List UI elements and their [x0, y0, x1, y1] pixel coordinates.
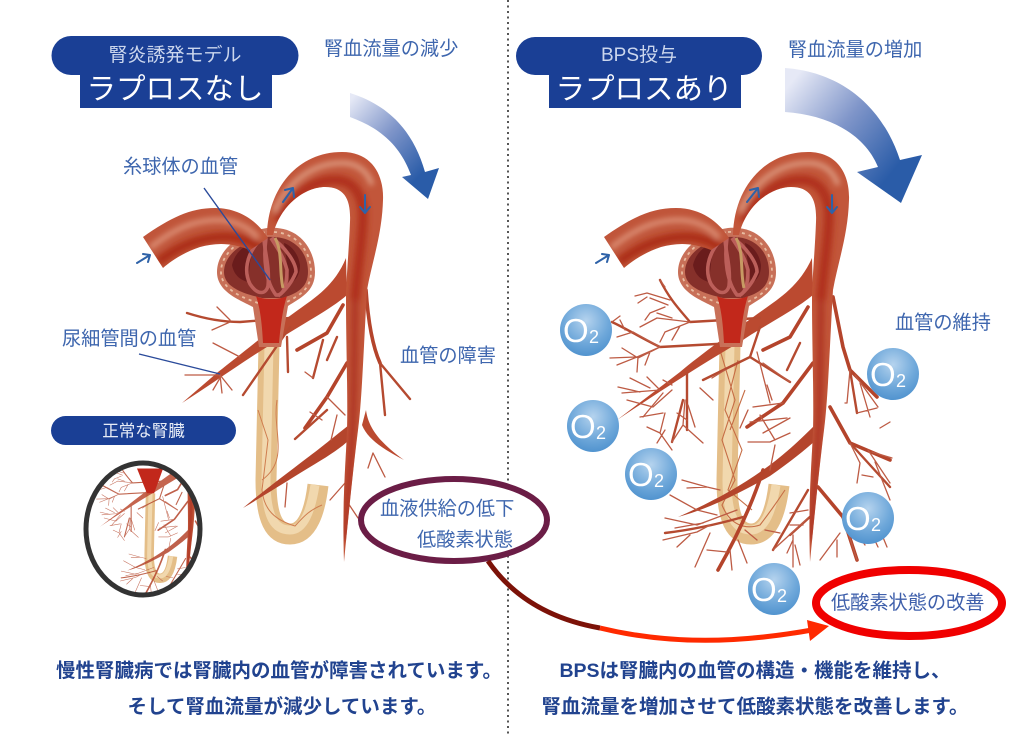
afferent arteriole	[143, 208, 268, 268]
oxygen bubble 5: O	[845, 500, 871, 537]
preserved branches	[610, 258, 892, 570]
glomerulus	[217, 228, 315, 347]
callout: reduced blood supply: 血液供給の低下	[380, 498, 514, 520]
oxygen bubble 6: O	[751, 571, 777, 608]
pointer: peritubular vessel	[139, 354, 220, 374]
callout: reduced blood supply	[361, 479, 547, 561]
oxygen bubble 5: 2	[871, 515, 881, 535]
heading: model pill without Raplos: 腎炎誘発モデル	[108, 44, 242, 66]
damaged branches	[182, 258, 410, 518]
callout: improved hypoxia	[816, 570, 1002, 636]
heading: model pill without Raplos: ラプロスなし	[86, 73, 264, 106]
afferent arteriole	[604, 208, 729, 268]
heading: model pill with Raplos: BPS投与	[601, 44, 677, 66]
oxygen bubble 4: O	[870, 356, 896, 393]
text: left summary: 慢性腎臓病では腎臓内の血管が障害されています。	[56, 659, 502, 682]
label: glomerular vessel: 糸球体の血管	[123, 156, 238, 178]
heading: model pill with Raplos	[516, 37, 762, 108]
arrow: from hypoxia to improvement	[488, 561, 829, 641]
oxygen bubble 1: 2	[589, 327, 599, 347]
panel: right model with Raplos	[516, 37, 1002, 718]
arrow: increased flow	[785, 68, 922, 203]
label: increased renal blood flow: 腎血流量の増加	[788, 39, 922, 61]
pill: normal kidney: 正常な腎臓	[102, 422, 185, 440]
heading: model pill with Raplos: ラプロスあり	[555, 73, 733, 106]
label: peritubular vessel: 尿細管間の血管	[62, 328, 196, 350]
pointer: glomerular vessel	[204, 188, 270, 280]
callout: improved hypoxia: 低酸素状態の改善	[831, 592, 984, 614]
efferent arteriole and trunk	[267, 152, 383, 562]
oxygen bubble 3: 2	[654, 471, 664, 491]
tubule with veins	[720, 345, 785, 534]
illustration: preserved vessels	[596, 152, 892, 570]
efferent arteriole and trunk	[733, 152, 849, 562]
text: right summary: 腎血流量を増加させて低酸素状態を改善します。	[541, 695, 969, 718]
oxygen bubble 6: 2	[777, 586, 787, 606]
oxygen bubble 4	[867, 348, 919, 400]
panel: left model without Raplos	[51, 36, 547, 718]
tubule with veins	[258, 345, 322, 534]
illustration: damaged vessels	[137, 152, 410, 562]
text: right summary	[541, 659, 969, 718]
text: right summary: BPSは腎臓内の血管の構造・機能を維持し、	[559, 659, 951, 682]
text: left summary	[56, 659, 502, 718]
oxygen bubble 4: 2	[896, 371, 906, 391]
glomerulus	[678, 228, 776, 347]
text: left summary: そして腎血流量が減少しています。	[128, 695, 436, 718]
label: decreased renal blood flow: 腎血流量の減少	[324, 38, 458, 60]
callout: reduced blood supply: 低酸素状態	[417, 529, 513, 551]
oxygen bubble 2: O	[570, 408, 596, 445]
flow arrows	[137, 188, 370, 263]
oxygen bubble 5	[842, 492, 894, 544]
oxygen bubble 3	[625, 448, 677, 500]
label: vascular damage: 血管の障害	[400, 345, 496, 367]
oxygen bubble 3: O	[628, 456, 654, 493]
heading: model pill without Raplos	[52, 36, 299, 108]
pill: normal kidney	[51, 416, 236, 445]
arrow: decreased flow	[350, 93, 439, 199]
inset: normal kidney	[84, 460, 202, 598]
divider: dotted centre line	[507, 0, 509, 734]
oxygen bubble 1	[560, 304, 612, 356]
label: vessel preservation: 血管の維持	[895, 312, 991, 334]
oxygen bubble 1: O	[563, 312, 589, 349]
oxygen bubble 2	[567, 400, 619, 452]
oxygen bubble 6	[748, 563, 800, 615]
flow arrows	[596, 188, 837, 263]
oxygen bubble 2: 2	[596, 423, 606, 443]
